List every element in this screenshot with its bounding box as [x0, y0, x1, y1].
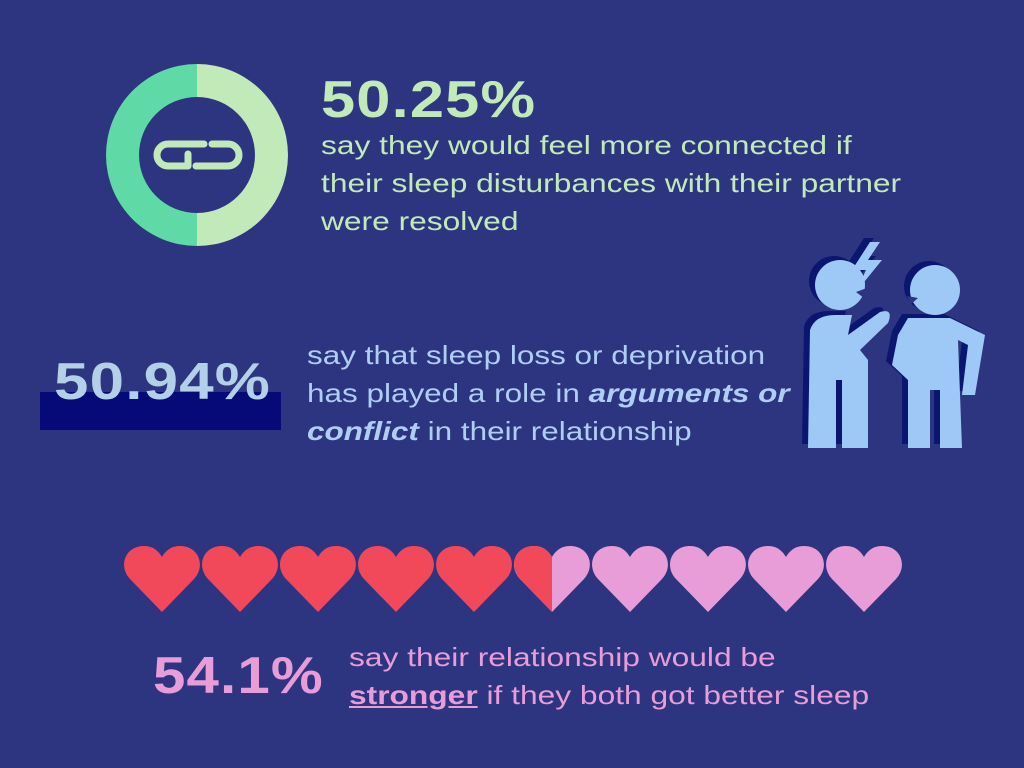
stat 1 text: were resolved	[321, 206, 518, 236]
stat 1 number: 50.25%	[321, 71, 536, 129]
stat 3 text	[349, 642, 869, 710]
stat 3 text: stronger if they both got better sleep	[349, 680, 869, 710]
stat 1 text: their sleep disturbances with their partner	[321, 168, 901, 198]
stat 2 highlight bar	[40, 392, 281, 430]
stat 3 number: 54.1%	[153, 647, 324, 705]
donut chart: 50.25%	[106, 64, 288, 246]
stat 1 text	[321, 130, 901, 236]
stat 3 text: say their relationship would be	[349, 642, 776, 672]
icon: chain link	[157, 144, 239, 166]
stat 2 number: 50.94%	[54, 353, 271, 411]
stat 2 text: say that sleep loss or deprivation	[307, 340, 765, 370]
stat 2 text	[307, 340, 791, 446]
hearts row	[124, 546, 902, 612]
stat 1 text: say they would feel more connected if	[321, 130, 852, 160]
icon: arguing people	[802, 238, 985, 448]
stat 2 text: conflict in their relationship	[307, 416, 692, 446]
stat 2 text: has played a role in arguments or	[307, 378, 790, 408]
